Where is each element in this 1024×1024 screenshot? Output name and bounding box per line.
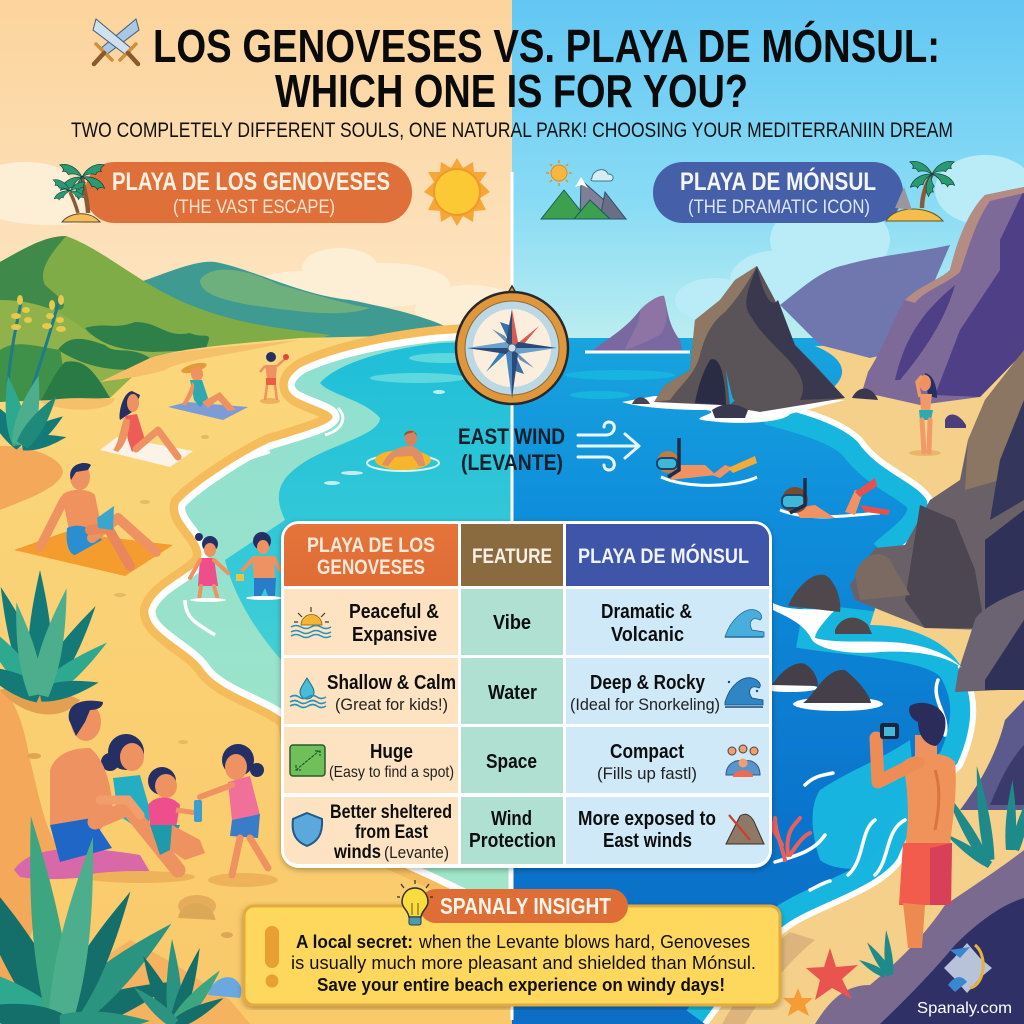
row: wind protection: Better sheltered xyxy=(330,802,452,823)
row: water: Shallow & Calm xyxy=(327,672,456,694)
row: vibe: Expansive xyxy=(352,624,437,646)
row: wind protection: from East xyxy=(355,822,429,843)
right shoreline cyan xyxy=(705,402,973,1024)
woman of family xyxy=(108,734,144,770)
snorkeler two xyxy=(780,478,890,518)
sea rocks with foam xyxy=(762,575,962,711)
man taking photo xyxy=(876,703,956,948)
column backgrounds xyxy=(284,589,769,864)
row: water: Deep & Rocky xyxy=(590,672,706,694)
icon: map with arrows xyxy=(290,745,325,776)
icon: exclamation mark xyxy=(265,926,279,988)
row: wind protection: East winds xyxy=(603,830,692,852)
row: vibe: Dramatic & xyxy=(601,601,692,623)
agave plant upper left xyxy=(0,295,68,452)
big top right cliff xyxy=(862,187,1024,405)
row: space: Space xyxy=(486,751,537,773)
child with ball xyxy=(260,352,289,404)
icon: light bulb xyxy=(397,880,433,925)
left sky background xyxy=(0,0,512,345)
logo: Spanaly xyxy=(944,943,992,993)
header: Monsul: PLAYA DE MÓNSUL xyxy=(578,544,749,568)
pill: Playa de los Genoveses: PLAYA DE LOS GENOVESES xyxy=(112,168,390,196)
row: space: Huge xyxy=(370,741,413,763)
row: water: Water xyxy=(488,682,537,704)
icon: shield xyxy=(293,813,322,846)
right sand xyxy=(705,340,1024,1024)
row: space xyxy=(329,741,697,783)
pill: Playa de Mónsul: PLAYA DE MÓNSUL xyxy=(680,166,876,196)
woman on Monsul beach xyxy=(909,373,966,456)
row: vibe: Peaceful & xyxy=(349,601,439,623)
right plants xyxy=(857,765,1024,978)
title xyxy=(153,20,940,117)
wind label xyxy=(458,424,565,475)
insight text: when the Levante blows hard, Genoveses xyxy=(418,931,750,952)
right sea xyxy=(512,338,1024,1024)
row: space: (Fills up fastl) xyxy=(597,764,697,783)
agave plant lower left xyxy=(0,814,182,1024)
icon: sunset over water xyxy=(291,607,331,638)
agave plant left middle xyxy=(0,570,113,714)
snorkeler one xyxy=(657,438,757,485)
row: water: (Great for kids!) xyxy=(335,695,448,714)
woman with hat on blue towel xyxy=(168,361,248,420)
distant sea stack xyxy=(585,296,690,352)
row: water: (Ideal for Snorkeling) xyxy=(570,695,720,714)
icon: mountains with sun and cloud xyxy=(541,160,626,219)
insight text: is usually much more pleasant and shielded than Mónsul. xyxy=(291,952,756,973)
icon: water drop xyxy=(290,678,326,708)
reader on orange towel xyxy=(14,463,173,576)
left sea with shore xyxy=(152,333,512,915)
water highlights xyxy=(324,353,481,485)
center divider xyxy=(510,172,514,1020)
pale shallows xyxy=(152,333,512,915)
foam streaks xyxy=(775,680,946,890)
icon: crossed swords xyxy=(93,19,139,64)
wind label: (LEVANTE) xyxy=(461,450,563,475)
header: Genoveses: PLAYA DE LOS xyxy=(307,534,435,557)
darker sand patches xyxy=(0,340,300,1024)
girl in water xyxy=(190,533,228,602)
insight pill xyxy=(419,889,628,923)
clouds xyxy=(0,155,1024,335)
row: wind protection: Wind xyxy=(491,808,532,830)
left sand xyxy=(0,333,512,1024)
woman on white towel xyxy=(100,391,193,467)
pill: Playa de Mónsul: (THE DRAMATIC ICON) xyxy=(688,197,870,218)
light water patches xyxy=(565,370,920,869)
pill: Playa de los Genoveses: (THE VAST ESCAPE) xyxy=(173,197,335,218)
comparison table xyxy=(281,521,772,868)
row: wind protection: (Levante) xyxy=(384,843,449,862)
main rock arch xyxy=(622,266,878,423)
row: vibe: Volcanic xyxy=(611,624,684,646)
right sky background xyxy=(512,0,1024,345)
header: Monsul xyxy=(566,524,769,586)
insight text: A local secret: xyxy=(296,931,413,952)
family on sand xyxy=(14,701,278,887)
far cliff xyxy=(780,245,950,358)
right shore foam xyxy=(705,402,973,1024)
father xyxy=(50,748,113,830)
header: Genoveses xyxy=(284,524,458,586)
pill: Playa de Mónsul xyxy=(653,162,903,223)
row: space: Compact xyxy=(610,741,684,763)
header: Feature xyxy=(461,524,563,586)
coral xyxy=(773,818,810,860)
row: wind protection: More exposed to xyxy=(578,808,716,830)
older girl xyxy=(208,873,278,887)
wind arrow icon xyxy=(578,422,639,470)
row: vibe: Vibe xyxy=(493,612,531,634)
toddler xyxy=(148,767,176,795)
left mountains xyxy=(0,236,465,405)
sand band along shore xyxy=(152,333,512,915)
shells and pebbles xyxy=(27,435,241,998)
lower right dark rocks xyxy=(850,350,1024,810)
header: Genoveses: GENOVESES xyxy=(317,556,425,579)
bottom right rock xyxy=(815,850,1024,1024)
icon: wave xyxy=(725,610,764,637)
tan sand band xyxy=(722,932,815,1024)
insight text xyxy=(291,931,756,995)
pill: Playa de los Genoveses xyxy=(85,162,412,223)
row: vibe xyxy=(349,601,692,646)
starfish xyxy=(783,948,858,1016)
swimmer with yellow ring xyxy=(367,430,439,471)
icon: palm and island right xyxy=(886,160,956,221)
deeper turquoise water xyxy=(225,340,512,860)
row: water xyxy=(327,672,720,714)
icon: rocky wave xyxy=(725,678,763,707)
compass xyxy=(456,286,568,404)
icon: crowd xyxy=(726,745,760,777)
icon: exposed rock xyxy=(726,814,764,844)
boy in water xyxy=(236,532,282,600)
insight pill: SPANALY INSIGHT xyxy=(440,893,611,919)
row: wind protection: Protection xyxy=(469,830,556,852)
agave plant small xyxy=(130,939,227,1024)
insight box xyxy=(244,880,780,1005)
insight text: Save your entire beach experience on windy days! xyxy=(317,974,725,995)
icon: sun xyxy=(424,158,490,226)
row: wind protection xyxy=(330,802,716,863)
title: WHICH ONE IS FOR YOU? xyxy=(275,65,748,117)
row: wind protection: winds xyxy=(333,842,381,863)
wind label: EAST WIND xyxy=(458,424,565,449)
header: Feature: FEATURE xyxy=(472,545,552,568)
logo wordmark: Spanaly.com xyxy=(917,1000,1012,1017)
row: space: (Easy to find a spot) xyxy=(329,764,454,781)
icon: palm left xyxy=(51,163,106,222)
